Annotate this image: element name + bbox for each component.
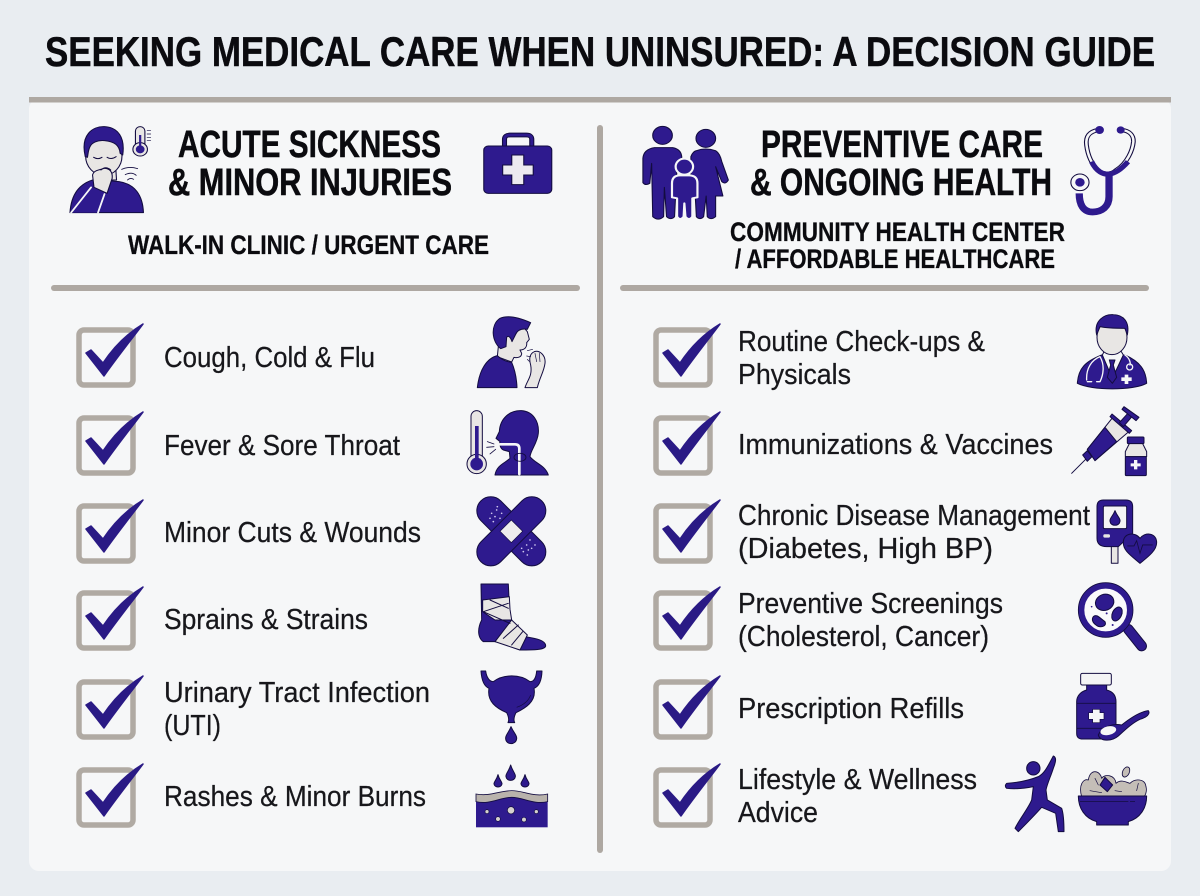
item: prescription refills: Prescription Refills [738, 693, 964, 725]
item: lifestyle and wellness advice [656, 756, 1147, 832]
icon: crossed bandages [471, 491, 552, 572]
item: chronic disease management [656, 500, 1157, 565]
panel: preventive care and ongoing health [620, 124, 1157, 832]
icon: salad bowl [1078, 766, 1147, 825]
item: routine check-ups and physicals: Physicals [738, 359, 851, 391]
item: immunizations and vaccines [656, 407, 1147, 476]
item: chronic disease management: (Diabetes, High BP) [738, 533, 993, 565]
item: rashes and minor burns: Rashes & Minor Burns [164, 781, 426, 813]
heading: preventive care: & ONGOING HEALTH [750, 162, 1052, 204]
icon: medicine bottle and spoon [1077, 673, 1149, 740]
item: lifestyle and wellness advice: Lifestyle & Wellness [738, 764, 977, 796]
icon: sick person with thermometer [70, 127, 151, 213]
icon: thermometer and throat [467, 411, 548, 475]
icon: stethoscope [1071, 126, 1133, 212]
item: lifestyle and wellness advice: Advice [738, 797, 818, 829]
subheading: community health center: COMMUNITY HEALTH CENTER [730, 217, 1065, 247]
subheading: walk-in clinic: WALK-IN CLINIC / URGENT CARE [128, 230, 489, 260]
heading: acute sickness [168, 124, 452, 204]
item: immunizations and vaccines: Immunizations & Vaccines [738, 429, 1053, 461]
icon: family [643, 126, 728, 219]
icon: person exercising [1005, 756, 1064, 832]
subheading: community health center: / AFFORDABLE HEALTHCARE [735, 244, 1055, 274]
heading: preventive care: PREVENTIVE CARE [761, 124, 1043, 166]
icon: glucose meter and heart [1097, 500, 1157, 563]
icon: person coughing [477, 317, 545, 388]
item: minor cuts and wounds: Minor Cuts & Wounds [164, 517, 421, 549]
item: rashes and minor burns [79, 764, 548, 827]
item: sprains and strains: Sprains & Strains [164, 604, 368, 636]
heading: acute sickness: ACUTE SICKNESS [178, 124, 441, 166]
subheading: community health center [730, 217, 1065, 274]
panel: acute sickness and minor injuries [51, 124, 580, 827]
icon: bandaged ankle [479, 584, 546, 650]
item: sprains and strains [79, 584, 546, 650]
item: preventive screenings [656, 583, 1142, 653]
icon: magnifying glass with cells [1078, 583, 1142, 646]
icon: skin layers with droplets [476, 765, 548, 827]
item: minor cuts and wounds [79, 491, 552, 572]
heading: preventive care [750, 124, 1052, 204]
item: preventive screenings: (Cholesterol, Cancer) [738, 621, 989, 653]
item: fever and sore throat: Fever & Sore Throat [164, 430, 400, 462]
item: urinary tract infection: (UTI) [164, 710, 221, 742]
item: chronic disease management: Chronic Disease Management [738, 500, 1090, 532]
icon: doctor [1077, 315, 1147, 389]
icon: first aid kit [484, 135, 552, 193]
item: cough, cold and flu [79, 317, 545, 388]
item: routine check-ups and physicals [656, 315, 1147, 391]
item: prescription refills [656, 673, 1149, 740]
icon: bladder with droplet [481, 671, 542, 744]
heading: acute sickness: & MINOR INJURIES [168, 162, 452, 204]
item: preventive screenings: Preventive Screenings [738, 588, 1003, 620]
item: urinary tract infection [79, 671, 542, 744]
item: fever and sore throat [79, 411, 548, 475]
item: cough, cold and flu: Cough, Cold & Flu [164, 342, 375, 374]
icon: syringe and vial [1072, 407, 1147, 476]
item: routine check-ups and physicals: Routine Check-ups & [738, 326, 985, 358]
item: urinary tract infection: Urinary Tract Infection [164, 677, 430, 709]
